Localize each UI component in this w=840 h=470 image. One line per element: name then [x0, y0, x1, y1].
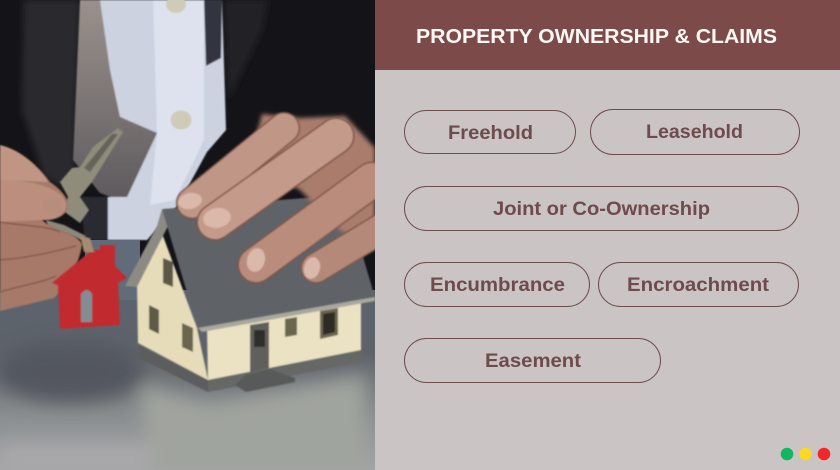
model house [125, 195, 375, 392]
panel: title banner [375, 0, 840, 70]
pill: Freehold: Freehold [448, 123, 533, 144]
pill: Leasehold [590, 110, 800, 154]
red house keychain [52, 236, 127, 329]
jacket left lapel [22, 0, 80, 195]
icon: three status dots [781, 448, 830, 460]
title: PROPERTY OWNERSHIP & CLAIMS [416, 26, 777, 48]
pill: Encumbrance [404, 262, 590, 306]
table [0, 290, 375, 470]
left hand [0, 145, 82, 311]
pill: Freehold [404, 110, 576, 154]
pill: Encumbrance: Encumbrance [430, 275, 565, 296]
pill: Leasehold: Leasehold [646, 122, 743, 143]
pill: Easement [404, 338, 660, 382]
pill: Encroachment: Encroachment [627, 275, 770, 296]
pill: Joint or Co-Ownership [404, 186, 798, 230]
pill: Easement: Easement [485, 351, 582, 372]
photo: hands holding a key and a model house [0, 0, 392, 470]
jacket right lapel [224, 0, 266, 91]
right hand [177, 114, 392, 281]
panel: right background [375, 0, 840, 470]
shirt [73, 0, 226, 240]
pill: Joint or Co-Ownership: Joint or Co-Ownership [493, 199, 710, 220]
fingernails [177, 191, 323, 281]
key [46, 128, 123, 240]
pill: Encroachment [598, 262, 798, 306]
